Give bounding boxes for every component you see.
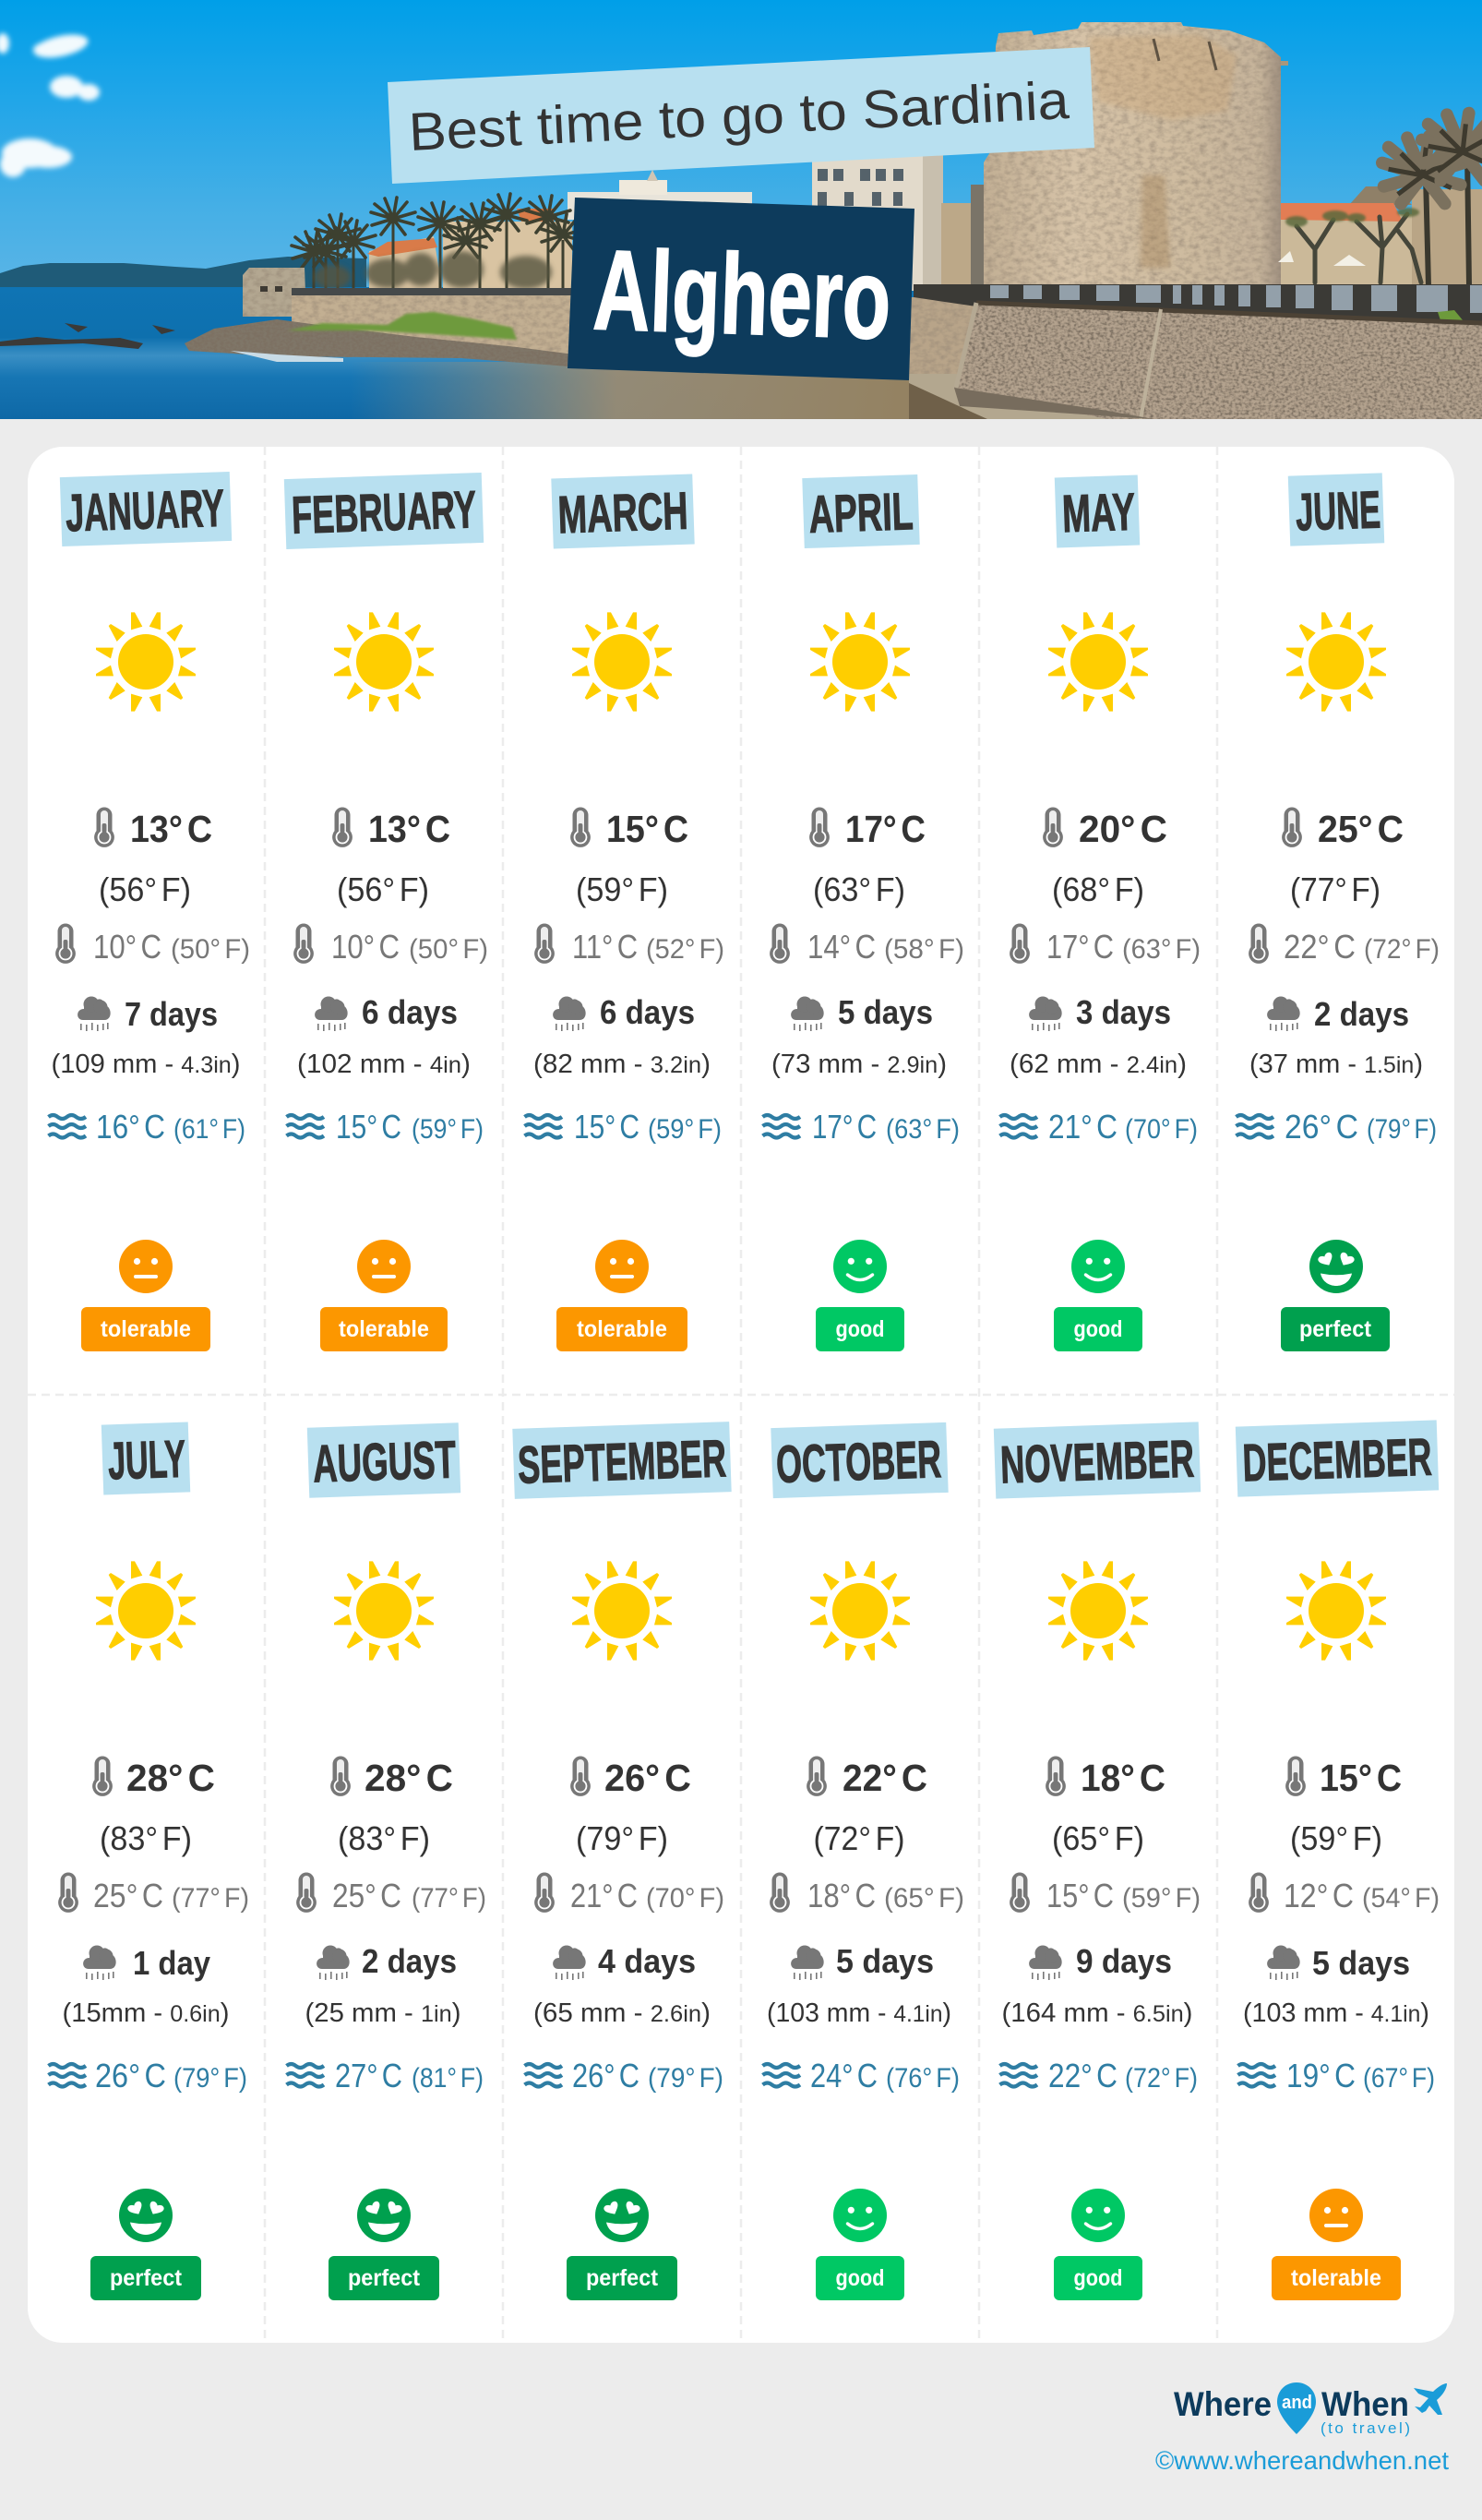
rating badge bbox=[556, 1307, 687, 1351]
column: September bbox=[512, 1422, 732, 2300]
month label bbox=[60, 472, 232, 546]
icon: thermometer high bbox=[1046, 1756, 1066, 1796]
rainfall: (82 mm - 3.2in) bbox=[533, 1050, 711, 1079]
logo: Where and When to travel: Where bbox=[1174, 2385, 1272, 2423]
sea temperature: 16° C bbox=[96, 1108, 165, 1146]
low temperature fahrenheit: (77° F) bbox=[412, 1883, 486, 1914]
icon: thermometer low bbox=[770, 1872, 790, 1913]
icon: love face bbox=[595, 2189, 649, 2242]
icon: thermometer high bbox=[330, 1756, 351, 1796]
rating badge: tolerable bbox=[1291, 2265, 1381, 2291]
month label: SEPTEMBER bbox=[517, 1429, 727, 1495]
icon: sea waves bbox=[1238, 2064, 1275, 2086]
low temperature: 18° C bbox=[807, 1877, 876, 1914]
rating badge: perfect bbox=[1299, 1316, 1372, 1342]
rainy days: 1 day bbox=[133, 1944, 210, 1982]
icon: thermometer low bbox=[293, 923, 314, 964]
high temperature fahrenheit: (56° F) bbox=[99, 870, 191, 908]
icon: thermometer low bbox=[1010, 923, 1030, 964]
high temperature fahrenheit: (79° F) bbox=[576, 1819, 668, 1857]
icon: thermometer low bbox=[534, 923, 555, 964]
low temperature fahrenheit: (77° F) bbox=[172, 1883, 249, 1914]
sea temperature: 15° C bbox=[574, 1108, 639, 1146]
heading: Alghero bbox=[568, 198, 914, 380]
icon: sea waves bbox=[762, 2064, 800, 2086]
high temperature fahrenheit: (83° F) bbox=[100, 1819, 192, 1857]
icon: rain cloud bbox=[1267, 1946, 1300, 1980]
sea temperature fahrenheit: (72° F) bbox=[1125, 2063, 1198, 2094]
icon: thermometer high bbox=[807, 1756, 827, 1796]
high temperature fahrenheit: (63° F) bbox=[813, 870, 905, 908]
sea temperature fahrenheit: (63° F) bbox=[886, 1114, 960, 1145]
icon: thermometer low bbox=[55, 923, 76, 964]
icon: thermometer high bbox=[1282, 807, 1302, 847]
high temperature fahrenheit: (59° F) bbox=[576, 870, 668, 908]
month label: OCTOBER bbox=[775, 1430, 942, 1494]
icon: sea waves bbox=[1000, 2064, 1037, 2086]
low temperature fahrenheit: (72° F) bbox=[1364, 934, 1440, 965]
high temperature fahrenheit: (65° F) bbox=[1052, 1819, 1144, 1857]
icon: thermometer low bbox=[58, 1872, 78, 1913]
icon: rain cloud bbox=[317, 1946, 350, 1980]
rainy days: 7 days bbox=[125, 995, 218, 1033]
icon: thermometer high bbox=[570, 807, 591, 847]
icon: sun bbox=[1286, 612, 1386, 712]
icon: sun bbox=[1048, 1561, 1148, 1661]
website credit: ©www.whereandwhen.net bbox=[1155, 2446, 1449, 2475]
low temperature fahrenheit: (50° F) bbox=[171, 934, 250, 965]
low temperature: 11° C bbox=[572, 928, 638, 966]
month label: JUNE bbox=[1295, 480, 1381, 542]
rainfall: (25 mm - 1in) bbox=[305, 1998, 461, 2028]
panel: monthly climate card bbox=[28, 447, 1454, 2343]
icon: thermometer high bbox=[92, 1756, 113, 1796]
high temperature: 17° C bbox=[845, 808, 926, 850]
icon: thermometer low bbox=[1249, 1872, 1269, 1913]
icon: rain cloud bbox=[78, 997, 111, 1031]
icon: sea waves bbox=[48, 2064, 86, 2086]
palm trees and town trees bbox=[314, 215, 563, 292]
high temperature: 22° C bbox=[843, 1757, 927, 1799]
low temperature fahrenheit: (70° F) bbox=[646, 1883, 724, 1914]
rating badge: good bbox=[836, 2265, 884, 2291]
sea temperature: 22° C bbox=[1048, 2057, 1117, 2094]
logo: Where and When to travel: (to travel) bbox=[1321, 2419, 1410, 2437]
low temperature fahrenheit: (63° F) bbox=[1122, 934, 1201, 965]
column: April bbox=[762, 474, 964, 1351]
rating badge: good bbox=[1074, 2265, 1122, 2291]
rating badge: perfect bbox=[110, 2265, 183, 2291]
low temperature: 14° C bbox=[807, 928, 876, 966]
column: March bbox=[524, 474, 724, 1351]
stone rampart bbox=[954, 303, 1482, 419]
rating badge bbox=[816, 2256, 904, 2300]
month label: MARCH bbox=[557, 482, 689, 545]
high temperature: 25° C bbox=[1318, 808, 1404, 850]
column: October bbox=[762, 1422, 964, 2300]
logo: Where and When to travel: and bbox=[1282, 2393, 1312, 2413]
low temperature: 10° C bbox=[93, 928, 161, 966]
rating badge: tolerable bbox=[577, 1316, 667, 1342]
low temperature: 12° C bbox=[1284, 1877, 1354, 1914]
low temperature: 25° C bbox=[93, 1877, 163, 1914]
sea wall bbox=[292, 288, 571, 295]
rainy days: 4 days bbox=[598, 1942, 696, 1980]
icon: thermometer low bbox=[296, 1872, 317, 1913]
low temperature fahrenheit: (58° F) bbox=[884, 934, 964, 965]
sea temperature fahrenheit: (76° F) bbox=[886, 2063, 960, 2094]
rating badge bbox=[90, 2256, 201, 2300]
sea temperature: 21° C bbox=[1048, 1108, 1117, 1146]
icon: thermometer low bbox=[534, 1872, 555, 1913]
sea temperature: 17° C bbox=[812, 1108, 877, 1146]
rating badge bbox=[1054, 1307, 1142, 1351]
icon: happy face bbox=[833, 1240, 887, 1293]
low temperature fahrenheit: (50° F) bbox=[409, 934, 488, 965]
icon: sea waves bbox=[48, 1115, 86, 1137]
rainy days: 5 days bbox=[838, 993, 933, 1031]
rating badge: tolerable bbox=[339, 1316, 429, 1342]
high temperature fahrenheit: (77° F) bbox=[1290, 870, 1380, 908]
low temperature: 21° C bbox=[570, 1877, 638, 1914]
icon: thermometer high bbox=[332, 807, 353, 847]
rainfall: (103 mm - 4.1in) bbox=[1243, 1998, 1429, 2028]
clouds bbox=[0, 30, 100, 177]
right side buildings and trees bbox=[1281, 214, 1412, 284]
low temperature fahrenheit: (54° F) bbox=[1362, 1883, 1440, 1914]
high temperature: 28° C bbox=[126, 1757, 215, 1799]
rainy days: 6 days bbox=[600, 993, 695, 1031]
icon: rain cloud bbox=[1029, 997, 1062, 1031]
high temperature: 13° C bbox=[130, 808, 212, 850]
rainfall: (103 mm - 4.1in) bbox=[767, 1998, 951, 2028]
rainy days: 9 days bbox=[1076, 1942, 1172, 1980]
high temperature fahrenheit: (59° F) bbox=[1290, 1819, 1382, 1857]
high temperature fahrenheit: (72° F) bbox=[814, 1819, 904, 1857]
month label: FEBRUARY bbox=[291, 480, 477, 546]
small coastal fort bbox=[243, 268, 306, 317]
column: July bbox=[48, 1422, 249, 2300]
low temperature fahrenheit: (52° F) bbox=[646, 934, 724, 965]
icon: love face bbox=[1309, 1240, 1363, 1293]
month label: JANUARY bbox=[65, 479, 225, 543]
high temperature: 15° C bbox=[606, 808, 688, 850]
icon: rain cloud bbox=[83, 1946, 116, 1980]
rating badge: perfect bbox=[586, 2265, 659, 2291]
icon: sun bbox=[1048, 612, 1148, 712]
icon: happy face bbox=[1071, 2189, 1125, 2242]
low temperature: 17° C bbox=[1046, 928, 1114, 966]
icon: neutral face bbox=[119, 1240, 173, 1293]
rainy days: 3 days bbox=[1076, 993, 1171, 1031]
month label bbox=[102, 1422, 190, 1495]
column: June bbox=[1237, 473, 1440, 1351]
sea temperature: 26° C bbox=[95, 2057, 166, 2094]
icon: map pin bbox=[1277, 2382, 1316, 2434]
column: November bbox=[994, 1422, 1201, 2300]
month label: NOVEMBER bbox=[999, 1430, 1195, 1494]
column: August bbox=[286, 1422, 486, 2300]
icon: love face bbox=[357, 2189, 411, 2242]
shore rocks and greenery bbox=[185, 319, 581, 367]
rating badge bbox=[1281, 1307, 1390, 1351]
month label bbox=[1055, 475, 1140, 547]
icon: happy face bbox=[1071, 1240, 1125, 1293]
icon: sea waves bbox=[524, 1115, 562, 1137]
sea temperature fahrenheit: (79° F) bbox=[648, 2063, 723, 2094]
icon: neutral face bbox=[1309, 2189, 1363, 2242]
icon: sun bbox=[572, 612, 672, 712]
icon: neutral face bbox=[595, 1240, 649, 1293]
icon: airplane bbox=[1414, 2383, 1447, 2415]
rainfall: (65 mm - 2.6in) bbox=[533, 1998, 711, 2028]
month label bbox=[512, 1422, 732, 1499]
icon: thermometer high bbox=[809, 807, 830, 847]
railed parapet bbox=[914, 284, 1482, 321]
rating badge bbox=[816, 1307, 904, 1351]
rainy days: 5 days bbox=[836, 1942, 934, 1980]
column: May bbox=[1000, 475, 1201, 1351]
rainfall: (73 mm - 2.9in) bbox=[771, 1050, 947, 1079]
sea temperature fahrenheit: (79° F) bbox=[173, 2063, 247, 2094]
logo: Where and When to travel: When bbox=[1321, 2385, 1409, 2423]
icon: thermometer low bbox=[1249, 923, 1269, 964]
sea temperature fahrenheit: (67° F) bbox=[1363, 2063, 1435, 2094]
month label: AUGUST bbox=[312, 1430, 457, 1494]
sea temperature: 26° C bbox=[1285, 1108, 1358, 1146]
rainy days: 6 days bbox=[362, 993, 458, 1031]
icon: thermometer high bbox=[1285, 1756, 1306, 1796]
icon: rain cloud bbox=[553, 997, 586, 1031]
icon: sea waves bbox=[524, 2064, 562, 2086]
high temperature: 28° C bbox=[365, 1757, 453, 1799]
icon: rain cloud bbox=[791, 997, 824, 1031]
rainfall: (37 mm - 1.5in) bbox=[1249, 1050, 1423, 1079]
icon: rain cloud bbox=[315, 997, 348, 1031]
icon: sun bbox=[334, 612, 434, 712]
rainfall: (109 mm - 4.3in) bbox=[52, 1050, 241, 1079]
sea temperature: 24° C bbox=[810, 2057, 878, 2094]
icon: sun bbox=[810, 612, 910, 712]
rainfall: (102 mm - 4in) bbox=[297, 1050, 471, 1079]
high temperature fahrenheit: (56° F) bbox=[337, 870, 429, 908]
rainy days: 2 days bbox=[362, 1942, 457, 1980]
low temperature fahrenheit: (65° F) bbox=[884, 1883, 964, 1914]
sea temperature: 26° C bbox=[572, 2057, 639, 2094]
icon: sun bbox=[810, 1561, 910, 1661]
icon: rain cloud bbox=[553, 1946, 586, 1980]
icon: rain cloud bbox=[1029, 1946, 1062, 1980]
rainy days: 2 days bbox=[1314, 995, 1409, 1033]
rainfall: (164 mm - 6.5in) bbox=[1002, 1998, 1192, 2028]
icon: sea waves bbox=[286, 2064, 324, 2086]
heading: Best time to go to Sardinia bbox=[388, 47, 1094, 184]
rating badge: good bbox=[836, 1316, 884, 1342]
high temperature: 20° C bbox=[1079, 808, 1167, 850]
rating badge: tolerable bbox=[101, 1316, 191, 1342]
high temperature fahrenheit: (68° F) bbox=[1052, 870, 1144, 908]
icon: rain cloud bbox=[1267, 997, 1300, 1031]
round stone tower bbox=[984, 22, 1281, 286]
month label bbox=[994, 1422, 1201, 1499]
town buildings bbox=[812, 157, 923, 291]
heading: Alghero: Alghero bbox=[592, 227, 892, 364]
month label bbox=[771, 1422, 949, 1498]
rainfall: (15mm - 0.6in) bbox=[63, 1998, 229, 2028]
high temperature: 15° C bbox=[1320, 1757, 1402, 1799]
month label bbox=[551, 474, 695, 549]
sea temperature: 19° C bbox=[1286, 2057, 1356, 2094]
rating badge: good bbox=[1074, 1316, 1122, 1342]
column: January bbox=[48, 472, 250, 1351]
sea temperature fahrenheit: (59° F) bbox=[648, 1114, 722, 1145]
rating badge bbox=[81, 1307, 210, 1351]
low temperature: 15° C bbox=[1046, 1877, 1114, 1914]
rating badge bbox=[567, 2256, 677, 2300]
icon: sun bbox=[572, 1561, 672, 1661]
icon: neutral face bbox=[357, 1240, 411, 1293]
month label bbox=[802, 474, 920, 548]
walkway and beach right of title bbox=[909, 297, 974, 374]
sea temperature fahrenheit: (70° F) bbox=[1125, 1114, 1198, 1145]
month label: APRIL bbox=[808, 482, 914, 545]
column: December bbox=[1236, 1420, 1440, 2300]
sea temperature fahrenheit: (79° F) bbox=[1367, 1114, 1437, 1145]
month label bbox=[284, 473, 484, 549]
high temperature: 26° C bbox=[604, 1757, 691, 1799]
rating badge bbox=[1272, 2256, 1401, 2300]
month label: MAY bbox=[1061, 483, 1136, 544]
sea temperature fahrenheit: (61° F) bbox=[173, 1114, 245, 1145]
rating badge bbox=[1054, 2256, 1142, 2300]
icon: sea waves bbox=[1237, 1115, 1273, 1137]
rating badge bbox=[320, 1307, 448, 1351]
header photo: Alghero seafront bbox=[0, 0, 1482, 419]
sea temperature: 15° C bbox=[336, 1108, 401, 1146]
icon: sun bbox=[1286, 1561, 1386, 1661]
low temperature: 25° C bbox=[332, 1877, 401, 1914]
rainfall: (62 mm - 2.4in) bbox=[1010, 1050, 1187, 1079]
rating badge: perfect bbox=[348, 2265, 421, 2291]
sea temperature fahrenheit: (81° F) bbox=[412, 2063, 484, 2094]
icon: sea waves bbox=[1000, 1115, 1037, 1137]
rating badge bbox=[329, 2256, 439, 2300]
icon: thermometer high bbox=[94, 807, 114, 847]
icon: love face bbox=[119, 2189, 173, 2242]
icon: sun bbox=[96, 1561, 196, 1661]
icon: thermometer high bbox=[570, 1756, 591, 1796]
icon: sea waves bbox=[286, 1115, 324, 1137]
icon: happy face bbox=[833, 2189, 887, 2242]
icon: thermometer high bbox=[1043, 807, 1063, 847]
column: February bbox=[284, 473, 488, 1351]
high temperature: 18° C bbox=[1081, 1757, 1165, 1799]
high temperature fahrenheit: (83° F) bbox=[338, 1819, 430, 1857]
sea temperature fahrenheit: (59° F) bbox=[412, 1114, 484, 1145]
icon: sun bbox=[334, 1561, 434, 1661]
icon: rain cloud bbox=[791, 1946, 824, 1980]
month label bbox=[307, 1422, 460, 1498]
low temperature: 22° C bbox=[1284, 928, 1356, 966]
low temperature: 10° C bbox=[331, 928, 400, 966]
low temperature fahrenheit: (59° F) bbox=[1122, 1883, 1201, 1914]
icon: thermometer low bbox=[770, 923, 790, 964]
icon: sun bbox=[96, 612, 196, 712]
month label: JULY bbox=[107, 1430, 186, 1491]
rainy days: 5 days bbox=[1312, 1944, 1410, 1982]
icon: sea waves bbox=[762, 1115, 800, 1137]
logo: Where and When to travel bbox=[1174, 2382, 1447, 2437]
month label bbox=[1288, 473, 1384, 546]
heading: Best time to go to Sardinia: Best time to go to Sardinia bbox=[407, 70, 1071, 162]
sea temperature: 27° C bbox=[335, 2057, 402, 2094]
icon: thermometer low bbox=[1010, 1872, 1030, 1913]
high temperature: 13° C bbox=[368, 808, 450, 850]
